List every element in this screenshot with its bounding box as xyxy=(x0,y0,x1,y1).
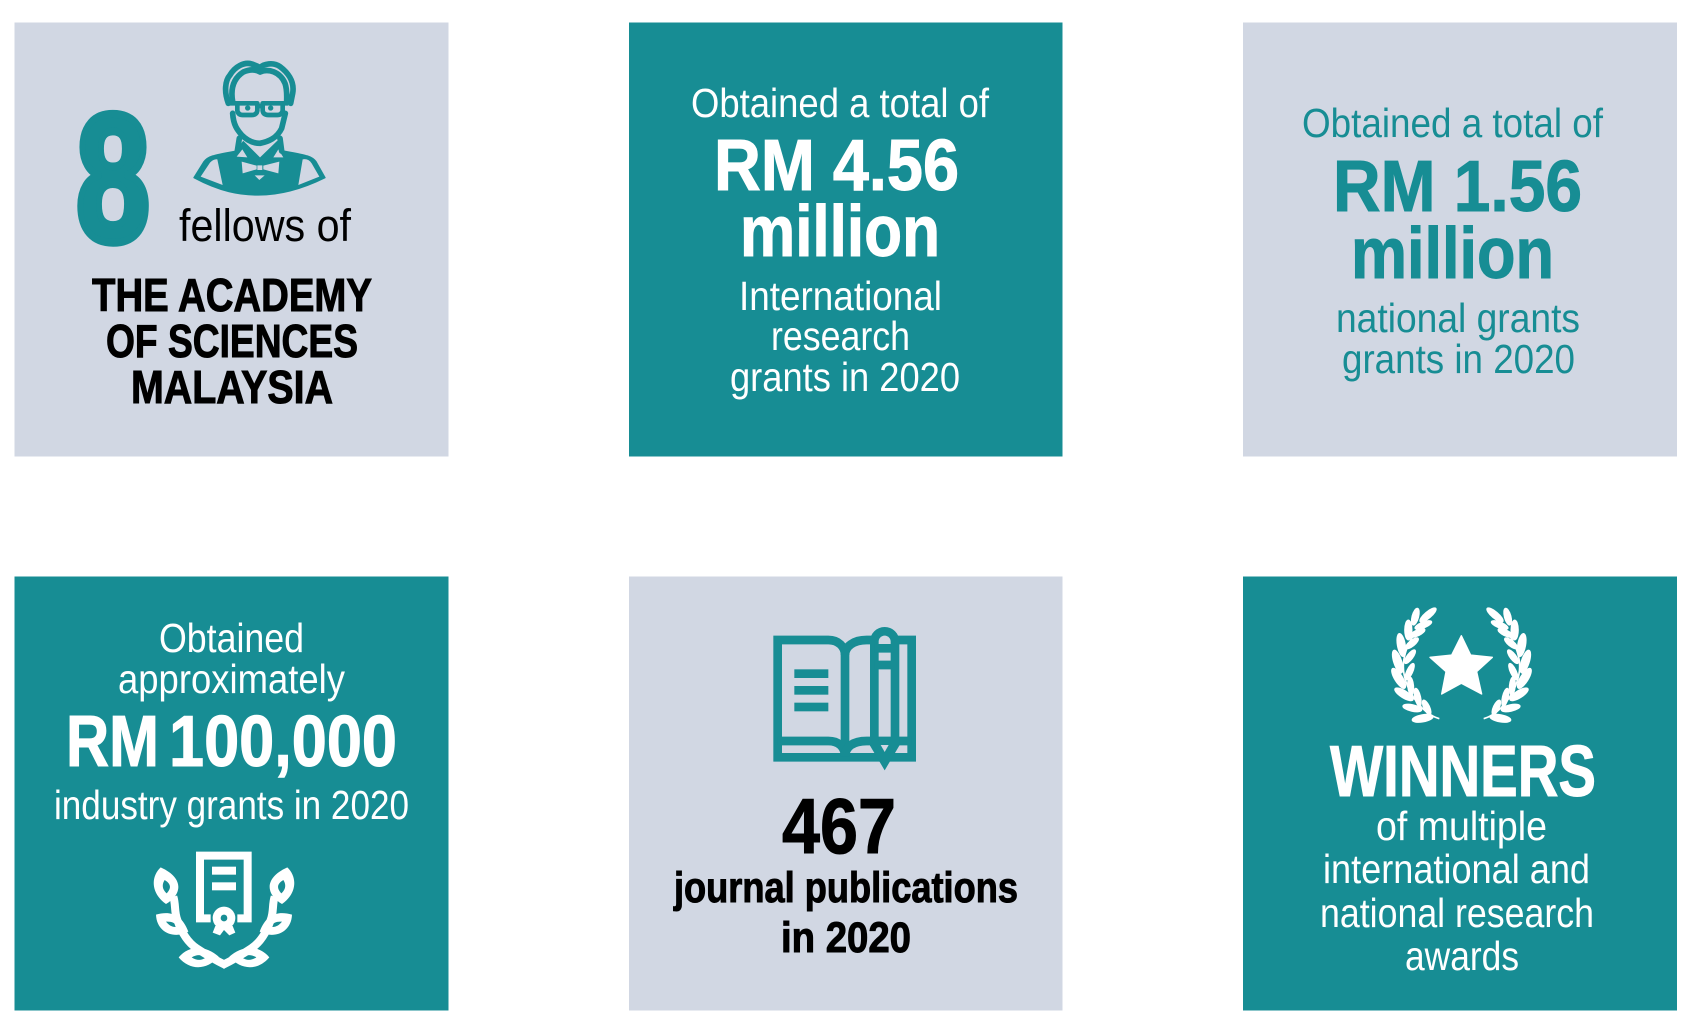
amount: RM 100,000 xyxy=(66,702,397,782)
heading: the academy of sciences malaysia: THE ACADEMY xyxy=(92,269,372,321)
amount: RM 1.56 million: RM 1.56 xyxy=(1333,147,1582,227)
text: national grants grants in 2020: grants in 2020 xyxy=(1342,336,1575,382)
text: international research grants in 2020 xyxy=(730,273,960,400)
heading: the academy of sciences malaysia xyxy=(92,269,372,413)
text: national grants grants in 2020 xyxy=(1336,295,1580,382)
icon: certificate with laurel xyxy=(154,856,294,967)
text: obtained approximately xyxy=(118,615,345,702)
amount: RM 100,000: 100,000 xyxy=(169,702,397,782)
text: obtained approximately: approximately xyxy=(118,656,345,702)
text: journal publications in 2020: journal publications xyxy=(673,864,1018,912)
text: obtained approximately: Obtained xyxy=(159,615,304,661)
amount: RM 4.56 million: million xyxy=(740,192,940,272)
heading: the academy of sciences malaysia: MALAYSIA xyxy=(131,361,333,413)
text: of multiple international and national research awards: of multiple xyxy=(1376,803,1547,849)
text: of multiple international and national research awards: national research xyxy=(1320,890,1594,936)
amount: RM 1.56 million xyxy=(1333,147,1582,294)
amount: RM 4.56 million: RM 4.56 xyxy=(714,126,959,206)
number: 467: 467 xyxy=(782,782,896,870)
panel: industry grants xyxy=(14,576,448,1010)
text: international research grants in 2020: research xyxy=(771,313,910,359)
amount: RM 100,000: RM xyxy=(66,702,159,782)
panel: international grants xyxy=(629,22,1062,456)
text: of multiple international and national research awards: international and xyxy=(1323,846,1590,892)
text: obtained a total of: Obtained a total of xyxy=(1302,100,1604,146)
amount: RM 4.56 million xyxy=(714,126,959,272)
text: national grants grants in 2020: national grants xyxy=(1336,295,1580,341)
text: journal publications in 2020 xyxy=(673,864,1018,962)
text: of multiple international and national research awards xyxy=(1320,803,1594,979)
panel: research awards xyxy=(1243,576,1677,1010)
text: journal publications in 2020: in 2020 xyxy=(781,914,911,962)
big number 8: 8 xyxy=(76,76,150,280)
text: of multiple international and national research awards: awards xyxy=(1405,933,1519,979)
text: international research grants in 2020: grants in 2020 xyxy=(730,354,960,400)
text: obtained a total of: Obtained a total of xyxy=(691,80,990,126)
icon: professor with glasses and bow tie xyxy=(194,63,325,195)
heading: winners: WINNERS xyxy=(1330,732,1596,812)
amount: RM 1.56 million: million xyxy=(1351,214,1554,294)
panel: national grants xyxy=(1243,22,1677,456)
panel: journal publications xyxy=(629,576,1062,1010)
text: international research grants in 2020: International xyxy=(739,273,942,319)
text: fellows of: fellows of xyxy=(179,200,351,251)
panel: academy fellows xyxy=(14,22,448,456)
icon: star with laurel wreath xyxy=(1389,606,1534,724)
heading: the academy of sciences malaysia: OF SCIENCES xyxy=(106,315,358,367)
text: industry grants in 2020: industry grants in 2020 xyxy=(54,782,409,828)
icon: open book with pencil xyxy=(778,631,912,770)
